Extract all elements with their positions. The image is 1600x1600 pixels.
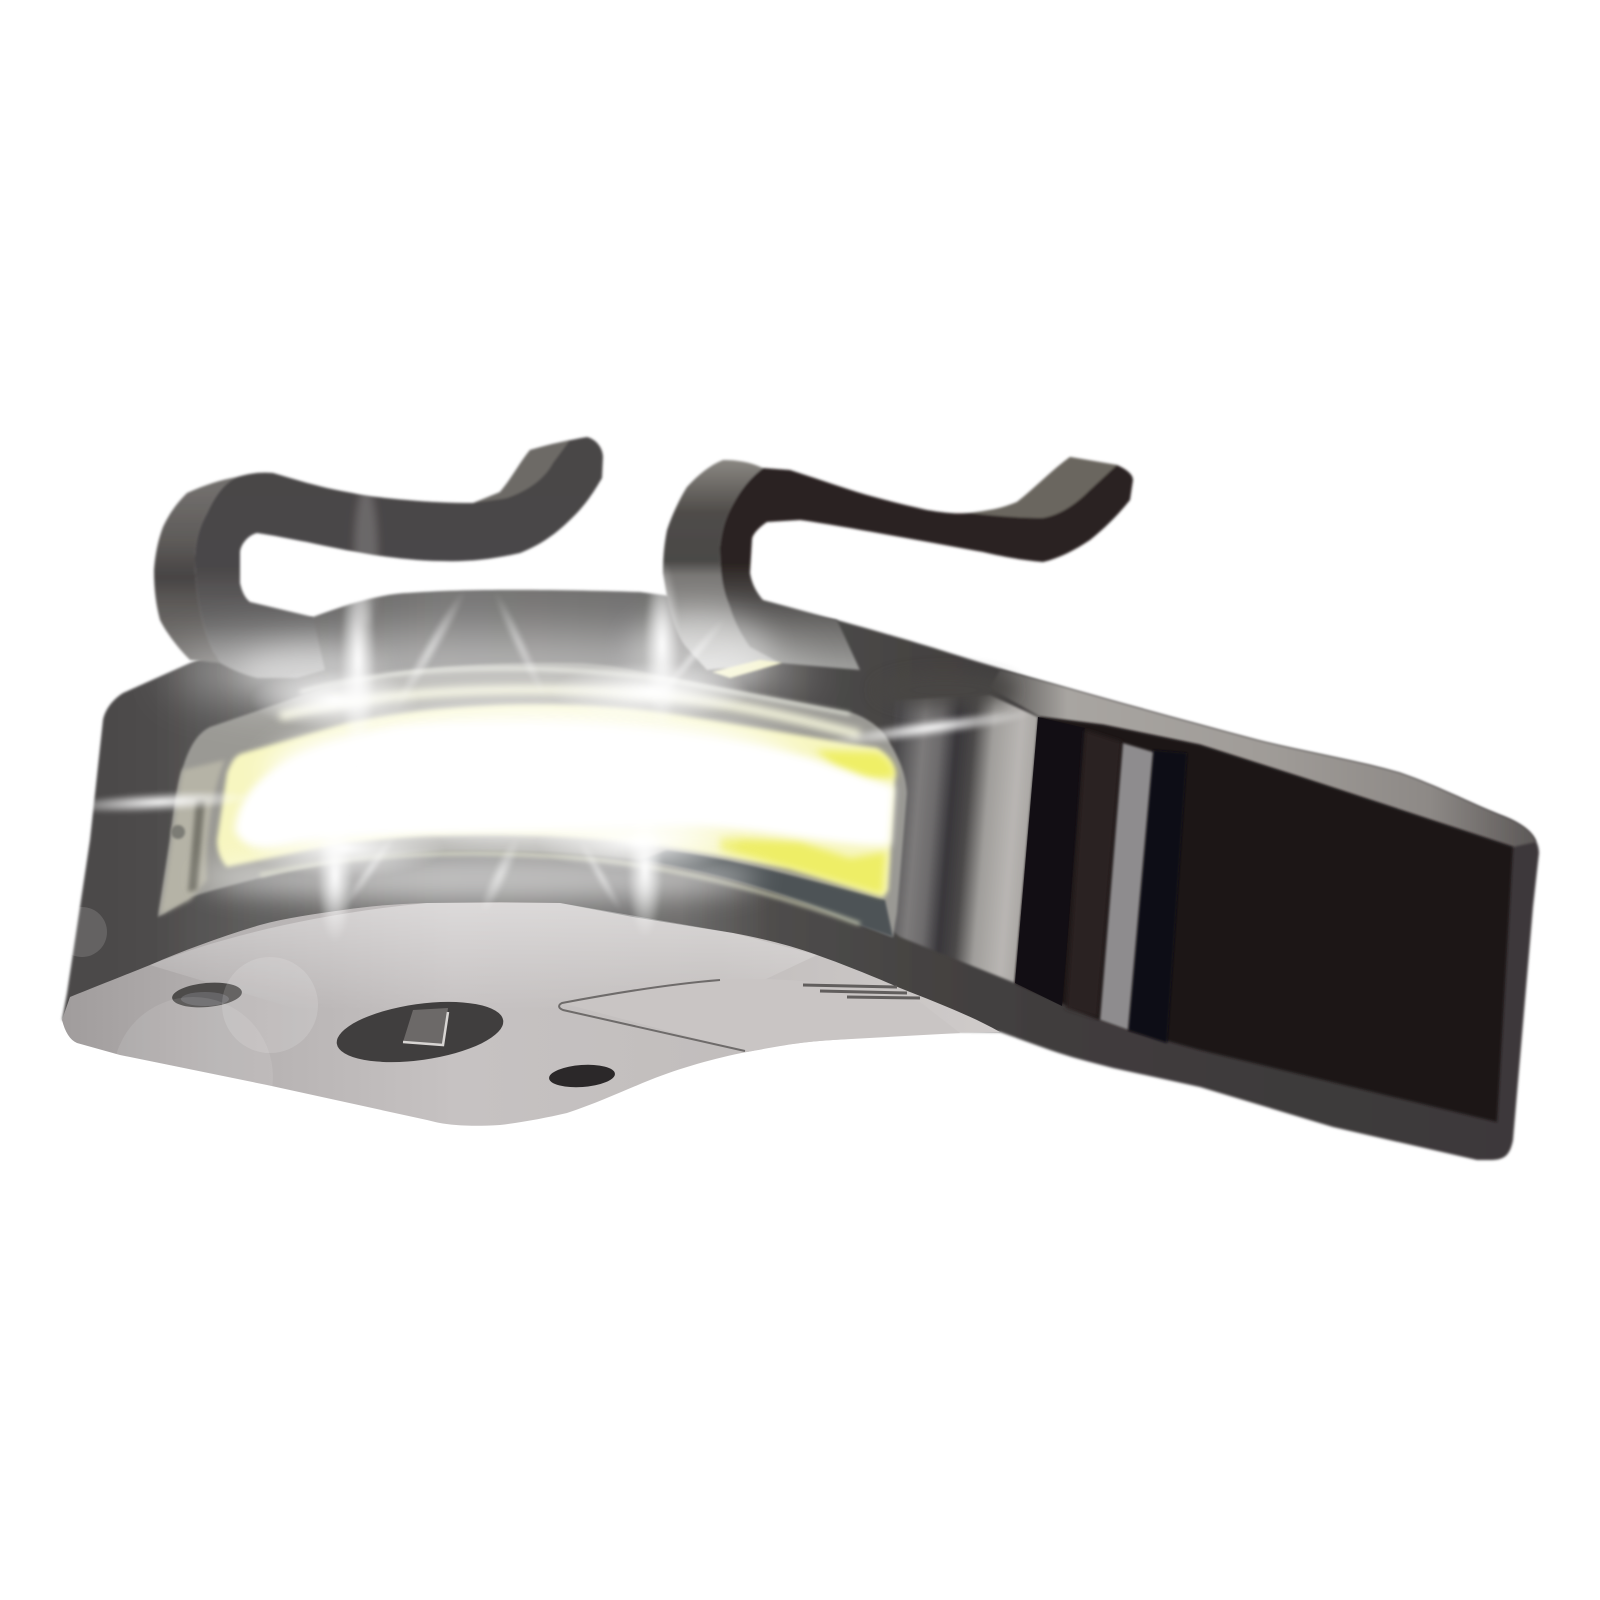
left glass edge	[160, 760, 225, 915]
upper left star	[340, 555, 376, 765]
hook tip surface	[473, 440, 570, 503]
grey highlight strip	[1100, 743, 1153, 1030]
black tail face	[1015, 717, 1513, 1122]
icon: right screw hole	[548, 1063, 616, 1089]
top chamfer	[990, 670, 1536, 847]
lower left bloom	[245, 818, 445, 878]
icon: centre switch opening	[333, 993, 507, 1071]
upper rim line	[300, 668, 850, 714]
lens glass frame	[158, 663, 907, 937]
panel: underside base plate	[62, 902, 1000, 1126]
upper right star	[644, 560, 680, 730]
glow: light haze over housing	[170, 610, 810, 902]
hook face	[195, 437, 603, 678]
lower rim line	[260, 853, 860, 924]
upper left bloom	[250, 670, 420, 730]
hook side band	[663, 460, 780, 670]
lower left star	[317, 807, 353, 943]
plate surface	[62, 902, 1000, 1126]
lower centre ray	[475, 834, 525, 916]
glossy centre section	[885, 695, 1038, 983]
lower right bloom	[535, 812, 745, 872]
left horizontal ray	[60, 787, 260, 817]
bokeh circle on housing	[57, 907, 107, 957]
COB LED strip	[217, 704, 895, 897]
white hot centre	[235, 724, 894, 848]
brown reflection	[1066, 730, 1122, 1018]
embossed marks	[803, 985, 920, 998]
hook side band	[154, 477, 237, 663]
icon: left clip hook	[154, 437, 603, 678]
lower right star	[627, 802, 663, 938]
black recess	[1015, 717, 1085, 1006]
yellow glint under hook	[712, 660, 782, 678]
upper centre diagonal	[489, 588, 551, 702]
left glass streak	[188, 800, 205, 892]
product illustration: LED cap clip light	[60, 435, 1541, 1162]
lower left diagonal	[340, 830, 400, 910]
saturated yellow bottom right	[720, 838, 886, 895]
upper left diagonal	[389, 586, 471, 714]
icon: light sparkle rays	[60, 555, 1035, 943]
centre bloom	[270, 709, 800, 841]
right horizontal ray	[825, 704, 1035, 752]
housing shell	[62, 590, 1539, 1160]
upper right bloom	[550, 662, 750, 722]
dark band by strip	[1128, 750, 1187, 1043]
panel: main housing body	[62, 590, 1539, 1160]
lower right dark trim	[640, 850, 893, 937]
hook face	[720, 457, 1133, 670]
panel: LED lens	[158, 663, 907, 937]
icon: left screw hole	[171, 980, 243, 1010]
lower right diagonal	[575, 836, 625, 914]
battery cover outline	[559, 980, 745, 1051]
upper lens light line	[280, 690, 860, 735]
dark shade above glossy section	[875, 672, 1015, 708]
bokeh circles	[116, 959, 318, 1062]
icon: right clip hook	[663, 457, 1133, 678]
battery cover panel	[562, 979, 960, 1052]
strap light streak	[354, 485, 378, 625]
lens screw	[171, 825, 185, 839]
plate upper sheen	[150, 903, 817, 1010]
hook tip surface	[970, 457, 1117, 518]
saturated yellow top right	[815, 750, 895, 780]
upper right diagonal	[651, 615, 729, 705]
